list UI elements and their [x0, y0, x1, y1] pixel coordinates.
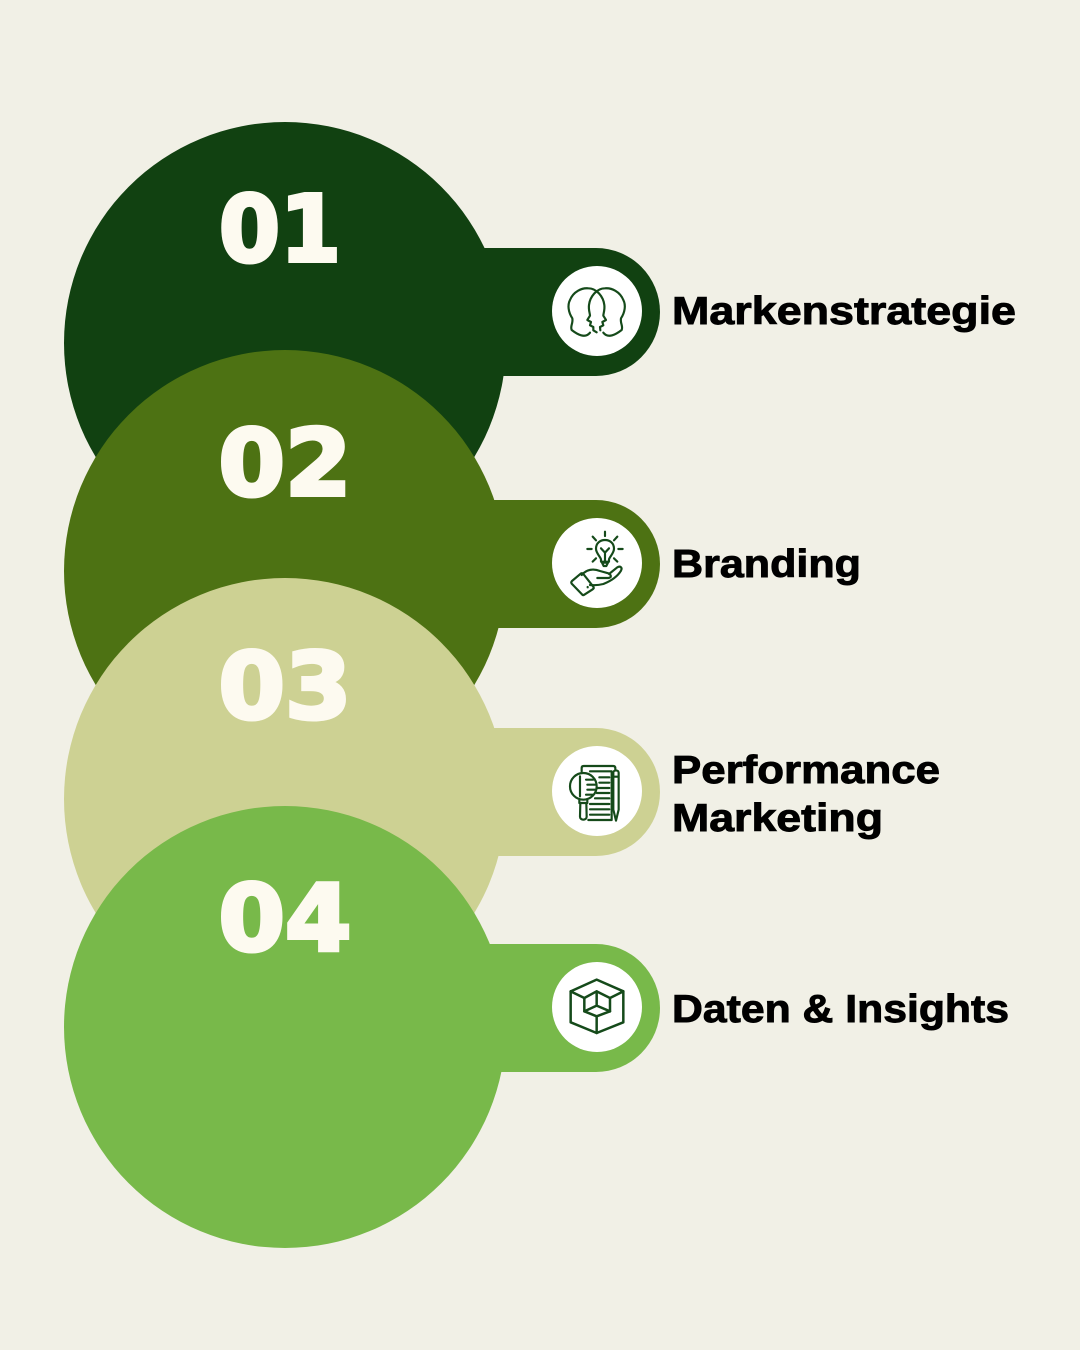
icon: isometric cube: [552, 962, 642, 1052]
step 03: [64, 578, 940, 1020]
step 04: [64, 806, 1009, 1248]
number 02: 02: [218, 410, 352, 517]
number 03: 03: [218, 633, 352, 740]
step 01: [64, 122, 1016, 564]
circle 03 with tab: [64, 578, 660, 1020]
icon: light bulb over hand: [552, 518, 642, 608]
label: Performance Marketing: [672, 749, 940, 840]
number 04: 04: [218, 865, 352, 972]
number 01: 01: [219, 176, 341, 283]
step 02: [64, 350, 861, 792]
icon: two heads: [552, 266, 642, 356]
label: Daten & Insights: Daten & Insights: [672, 988, 1009, 1031]
label: Performance Marketing: Performance: [672, 749, 940, 792]
label: Performance Marketing: Marketing: [672, 797, 883, 840]
icon: document with magnifier and pencil: [552, 746, 642, 836]
circle 02 with tab: [64, 350, 660, 792]
label: Markenstrategie: Markenstrategie: [672, 290, 1016, 333]
circle 04 with tab: [64, 806, 660, 1248]
circle 01 with tab: [64, 122, 660, 564]
label: Branding: Branding: [672, 543, 861, 586]
